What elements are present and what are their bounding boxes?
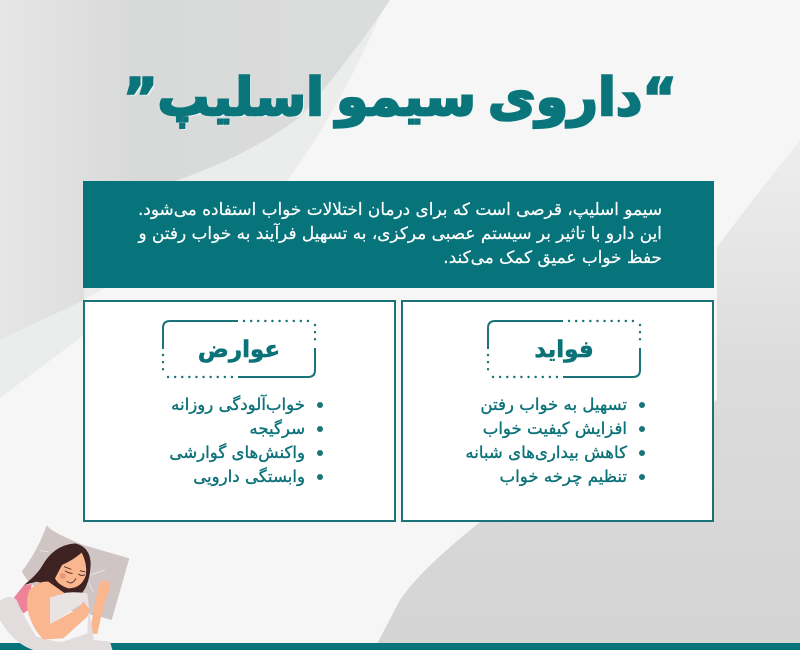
heading: benefits: فواید xyxy=(534,337,594,363)
panel: side effects xyxy=(83,300,396,522)
list: side effects: خواب‌آلودگی روزانه xyxy=(171,395,305,414)
description text xyxy=(138,199,662,268)
list: benefits: افزایش کیفیت خواب xyxy=(483,419,627,438)
panel: description xyxy=(83,181,714,288)
list: benefits xyxy=(465,395,645,486)
heading frame: benefits xyxy=(486,320,642,378)
icon: sleeping woman xyxy=(0,525,130,650)
list: side effects: سرگیجه xyxy=(249,419,305,438)
title: “داروی سیمو اسلیپ” xyxy=(123,68,677,128)
list: benefits: تسهیل به خواب رفتن xyxy=(480,395,627,414)
panel: benefits xyxy=(401,300,714,522)
heading: side effects: عوارض xyxy=(198,337,280,363)
list: benefits: کاهش بیداری‌های شبانه xyxy=(465,443,627,462)
list: side effects: وابستگی دارویی xyxy=(193,467,305,486)
list: side effects xyxy=(169,394,323,486)
description text: این دارو با تاثیر بر سیستم عصبی مرکزی، به تسهیل فرآیند به خواب رفتن و xyxy=(138,223,662,243)
heading frame: side effects xyxy=(162,320,316,378)
list: benefits: تنظیم چرخه خواب xyxy=(500,467,627,486)
description text: سیمو اسلیپ، قرصی است که برای درمان اختلالات خواب استفاده می‌شود. xyxy=(138,199,662,219)
list: side effects: واکنش‌های گوارشی xyxy=(169,443,305,462)
bottom bar xyxy=(0,643,800,650)
description text: حفظ خواب عمیق کمک می‌کند. xyxy=(443,247,662,267)
